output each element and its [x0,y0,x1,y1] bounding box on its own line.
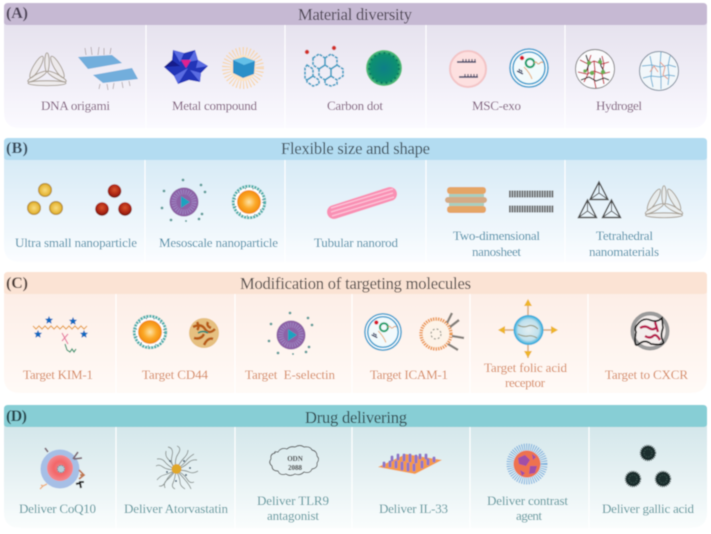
icon: stacked nanosheet [445,187,487,213]
label: two-dimensional nanosheet: Two-dimensional [453,228,540,243]
header bar B [4,138,707,160]
label: deliver TLR9 antagonist: antagonist [267,508,319,523]
label: target folic acid receptor: receptor [505,375,546,390]
icon: large tetrahedral nanomaterial [644,186,684,218]
icon: atorvastatin micelle [156,446,198,489]
icon: KIM-1 polymer [33,316,88,352]
label: target folic acid receptor: Target folic acid [484,360,568,375]
label: deliver contrast agent: agent [516,508,542,523]
label: target folic acid receptor [484,360,568,390]
header bar D [4,405,707,427]
heading: drug delivering: Drug delivering [305,408,407,427]
icon: carbon dot sphere [366,50,402,86]
header bar C [4,272,707,294]
icon: exosome with RNA [450,51,486,87]
label: deliver TLR9 antagonist [257,493,329,523]
icon: tubular nanorod [331,189,394,216]
icon: CoQ10 carrier [40,448,84,489]
label: target to CXCR: Target to CXCR [605,367,688,382]
icon: ODN 2088 cloud [270,446,318,476]
label: deliver atorvastatin: Deliver Atorvastatin [124,501,228,516]
panel letter A: (A) [6,5,28,22]
icon: CXCR nanoparticle [632,314,668,348]
icon: metal compound nanoparticle [227,52,259,84]
label: metal compound: Metal compound [172,98,258,113]
label: target CD44: Target CD44 [142,367,208,382]
icon: DNA origami sheets [78,47,138,90]
icon: ODN 2088 cloud: 2088 [288,464,302,472]
icon: DNA origami tetrahedron [27,53,67,86]
panel letter B: (B) [6,140,28,157]
label: two-dimensional nanosheet: nanosheet [472,244,521,259]
icon: metal compound polyhedron [164,50,208,84]
icon: hydrogel network [640,52,678,90]
icon: red nanoparticles [95,184,132,216]
icon: grey nanosheets [509,194,554,209]
label: deliver CoQ10: Deliver CoQ10 [19,501,96,516]
label: ultra small nanoparticle: Ultra small nanoparticle [15,235,137,250]
icon: small tetrahedra [578,182,620,218]
icon: mesoscale orange nanoparticle [232,185,266,219]
icon: hydrogel with cells [576,50,614,88]
icon: mesoscale purple nanoparticle [161,179,206,222]
icon: contrast agent particle [510,447,544,481]
icon: E-selectin nanoparticle [268,312,313,355]
icon: exosome cargo [510,49,548,87]
label: tetrahedral nanomaterials: Tetrahedral [596,228,653,243]
label: deliver contrast agent [487,493,568,523]
heading: flexible size and shape: Flexible size and shape [281,139,430,158]
icon: IL-33 plate [378,454,442,474]
label: tetrahedral nanomaterials: nanomaterials [589,244,659,259]
icon: gold nanoparticles [27,183,63,215]
panel letter D: (D) [6,408,27,425]
label: target ICAM-1: Target ICAM-1 [370,367,448,382]
label: deliver TLR9 antagonist: Deliver TLR9 [257,493,329,508]
icon: gallic acid particles [625,445,671,487]
icon: folic acid receptor particle with arrows [498,299,558,358]
icon: carbon dot lattice [305,46,343,86]
panel letter C: (C) [6,275,28,292]
panel A: material diversity [4,3,707,128]
label: carbon dot: Carbon dot [327,98,383,113]
icon: ODN 2088 cloud: ODN [287,455,303,463]
label: deliver gallic acid: Deliver gallic acid [602,501,694,516]
panel C: modification of targeting molecules [4,272,707,393]
icon: CD44 swirl nanoparticle [189,318,219,348]
icon: ICAM-1 exosome [365,314,401,350]
icon: ICAM-1 vesicle with antibodies [421,313,464,350]
panel D: drug delivering [4,405,707,528]
label: DNA origami: DNA origami [41,98,110,113]
label: mesoscale nanoparticle: Mesoscale nanoparticle [159,235,278,250]
label: deliver IL-33: Deliver IL-33 [379,501,448,516]
heading: material diversity: Material diversity [298,5,413,24]
label: target E-selectin: Target E-selectin [245,367,336,382]
label: tubular nanorod: Tubular nanorod [314,235,398,250]
header bar A [4,3,707,25]
label: hydrogel: Hydrogel [596,98,642,113]
panel B: flexible size and shape [4,138,707,262]
label: two-dimensional nanosheet [453,228,540,259]
icon: CD44 orange nanoparticle [133,315,167,349]
label: tetrahedral nanomaterials [589,228,659,259]
label: deliver contrast agent: Deliver contrast [487,493,568,508]
label: MSC-exo: MSC-exo [472,98,521,113]
label: target KIM-1: Target KIM-1 [23,367,93,382]
heading: modification of targeting molecules: Modification of targeting molecules [240,274,471,293]
